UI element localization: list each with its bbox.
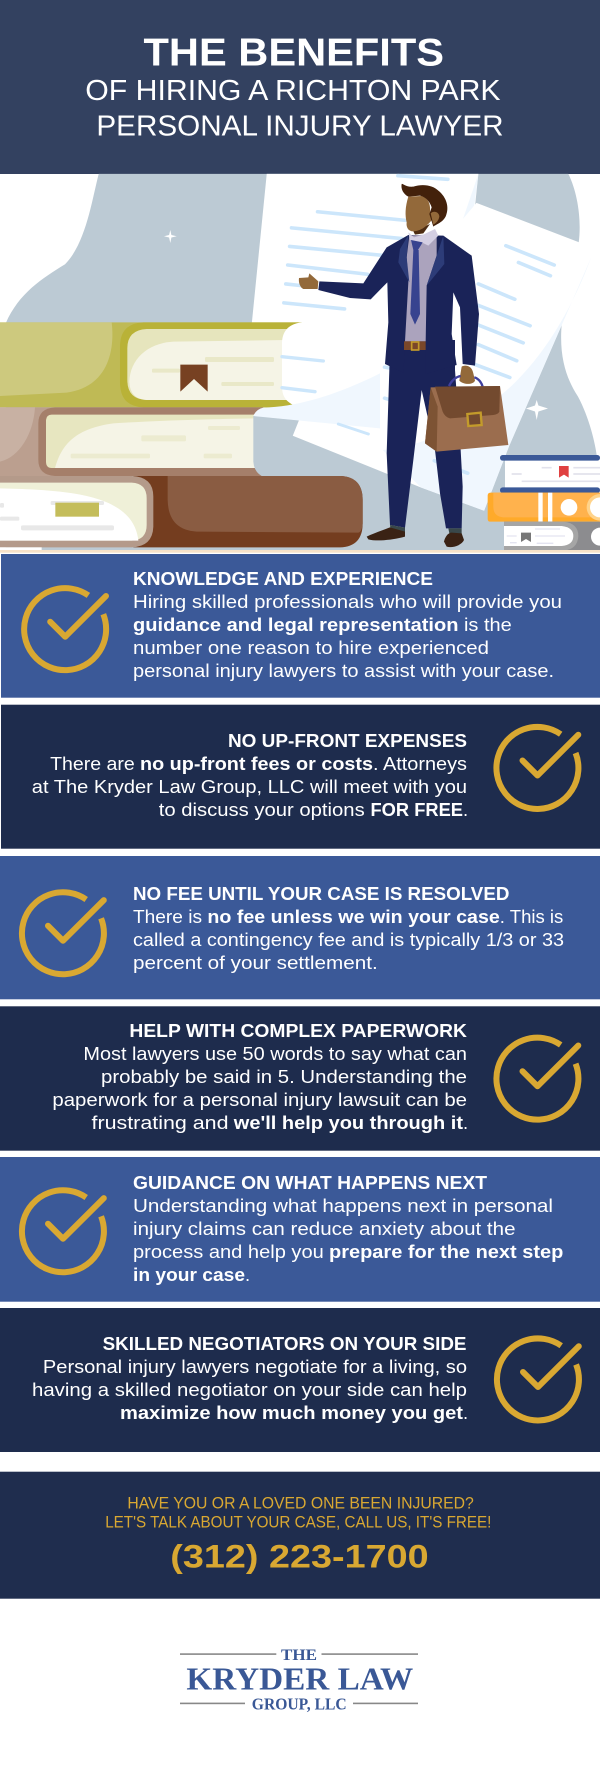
header panel — [0, 0, 600, 174]
body text: There are — [50, 753, 135, 774]
heading: HELP WITH COMPLEX PAPERWORK — [129, 1020, 468, 1041]
body text: . This is — [500, 906, 563, 927]
body text: in your case — [133, 1264, 245, 1285]
belt — [404, 341, 426, 350]
document text lines — [284, 176, 554, 473]
body text: . — [463, 1112, 468, 1133]
icon: gold check circle — [22, 1190, 104, 1272]
body text: at The Kryder Law Group, LLC will meet with you — [32, 776, 467, 797]
call to action text: HAVE YOU OR A LOVED ONE BEEN INJURED? — [127, 1494, 474, 1512]
body text: to discuss your options — [159, 799, 365, 820]
body text — [52, 1043, 468, 1133]
heading: SKILLED NEGOTIATORS ON YOUR SIDE — [103, 1333, 466, 1354]
jacket — [318, 235, 479, 374]
body text: having a skilled negotiator on your side can help — [32, 1379, 467, 1400]
body text: . Attorneys — [373, 753, 467, 774]
body text: maximize how much money you get — [120, 1402, 463, 1423]
panel: help with complex paperwork — [0, 1006, 600, 1151]
body text: . — [463, 1402, 468, 1423]
icon: gold check circle — [497, 1338, 579, 1420]
lapels — [398, 235, 444, 286]
neck and face — [406, 196, 433, 235]
panel: knowledge and experience — [1, 554, 600, 698]
panel: guidance on what happens next — [0, 1157, 600, 1302]
title: THE BENEFITS — [144, 31, 444, 74]
background shapes and documents — [6, 174, 600, 550]
logo: The Kryder Law Group, LLC: KRYDER LAW — [186, 1660, 413, 1696]
icon: gold check circle — [496, 1038, 578, 1120]
body text: Most lawyers use 50 words to say what can — [83, 1043, 467, 1064]
paper: second document — [293, 203, 591, 511]
body text: . — [245, 1264, 250, 1285]
heading: KNOWLEDGE AND EXPERIENCE — [133, 568, 433, 589]
book: brown bottom — [0, 476, 363, 550]
logo: The Kryder Law Group, LLC: THE — [281, 1647, 317, 1664]
panel: skilled negotiators on your side — [0, 1308, 600, 1452]
shirt — [405, 234, 437, 341]
hand: holding briefcase — [459, 366, 475, 384]
body text: prepare for the next step — [329, 1241, 563, 1262]
tie — [410, 240, 423, 325]
ear — [431, 212, 439, 225]
icon: gold check circle — [496, 727, 578, 809]
body text — [133, 906, 564, 973]
body text — [32, 753, 468, 820]
icon: gold check circle — [22, 892, 104, 974]
body text: percent of your settlement. — [133, 952, 378, 973]
hand: gesturing — [299, 273, 318, 289]
paper: large document — [252, 174, 478, 429]
body text: called a contingency fee and is typically 1/3 or 33 — [133, 929, 564, 950]
call to action text: LET'S TALK ABOUT YOUR CASE, CALL US, IT'S FREE! — [105, 1513, 491, 1531]
upper body — [299, 184, 479, 374]
body text: process and help you — [133, 1241, 324, 1262]
sparkles — [164, 230, 548, 420]
body text: . — [463, 799, 468, 820]
phone number: (312) 223-1700 — [170, 1538, 429, 1574]
body text — [133, 591, 562, 681]
heading: GUIDANCE ON WHAT HAPPENS NEXT — [133, 1172, 488, 1193]
body text: personal injury lawyers to assist with your case. — [133, 660, 554, 681]
lower body — [367, 340, 464, 547]
hair — [401, 184, 447, 227]
illustration: lawyer with books and documents — [0, 174, 600, 551]
lawyer figure — [299, 184, 508, 547]
body text: guidance and legal representation — [133, 614, 458, 635]
logo: The Kryder Law Group, LLC — [180, 1647, 418, 1714]
books: small stack right — [488, 455, 600, 551]
tan ground line — [0, 550, 600, 553]
body text: There is — [133, 906, 202, 927]
title — [85, 31, 504, 143]
body text: Hiring skilled professionals who will provide you — [133, 591, 562, 612]
briefcase and hand — [425, 366, 508, 452]
logo: The Kryder Law Group, LLC: GROUP, LLC — [252, 1695, 347, 1714]
body text — [32, 1356, 468, 1423]
body text: Personal injury lawyers negotiate for a living, so — [43, 1356, 467, 1377]
heading: NO FEE UNTIL YOUR CASE IS RESOLVED — [133, 883, 509, 904]
body text: we'll help you through it — [233, 1112, 463, 1133]
panel: call to action — [0, 1472, 600, 1599]
socks and shoes — [367, 525, 464, 547]
title: PERSONAL INJURY LAWYER — [96, 111, 504, 143]
body text: is the — [464, 614, 512, 635]
body text: frustrating and — [92, 1112, 228, 1133]
body text: injury claims can reduce anxiety about the — [133, 1218, 516, 1239]
body text: FOR FREE — [370, 799, 463, 820]
body text: number one reason to hire experienced — [133, 637, 489, 658]
title: OF HIRING A RICHTON PARK — [85, 75, 501, 107]
body text: probably be said in 5. Understanding the — [101, 1066, 467, 1087]
collar — [408, 229, 438, 246]
body text — [133, 1195, 563, 1285]
icon: bookmark — [180, 365, 208, 392]
body text: no up-front fees or costs — [140, 753, 373, 774]
trousers — [387, 340, 463, 528]
heading: NO UP-FRONT EXPENSES — [228, 730, 467, 751]
body text: Understanding what happens next in personal — [133, 1195, 553, 1216]
book: olive top — [0, 322, 323, 407]
stacked large books — [0, 322, 380, 550]
call to action text — [105, 1494, 491, 1531]
book: tan middle — [0, 373, 380, 476]
panel: no up-front expenses — [1, 705, 600, 849]
body text: paperwork for a personal injury lawsuit can be — [52, 1089, 467, 1110]
panel: no fee until case is resolved — [0, 856, 600, 999]
body text: no fee unless we win your case — [207, 906, 500, 927]
icon: briefcase — [425, 386, 508, 452]
icon: gold check circle — [24, 588, 106, 670]
